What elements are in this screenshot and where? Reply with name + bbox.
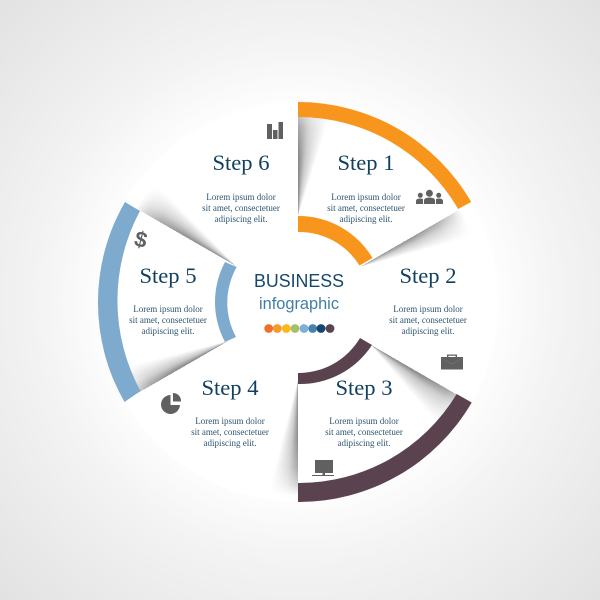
heading: step 1: Step 1 bbox=[337, 150, 395, 175]
text: step 2 body: Lorem ipsum dolor bbox=[393, 304, 463, 314]
shadow: left of step 3 bbox=[277, 381, 298, 494]
icon: people bbox=[416, 190, 443, 204]
panel: step 1 wedge bbox=[298, 102, 472, 266]
text: step 5 body: sit amet, consectetuer bbox=[129, 315, 207, 325]
outer band: step 5 bbox=[98, 202, 140, 402]
subtitle: infographic: infographic bbox=[259, 294, 339, 313]
outer band: step 3 bbox=[298, 394, 472, 502]
icon: bar chart bbox=[267, 122, 283, 139]
text: step 5 body: adipiscing elit. bbox=[142, 326, 194, 336]
text: step 3 body: adipiscing elit. bbox=[338, 438, 390, 448]
text: step 4 body: adipiscing elit. bbox=[204, 438, 256, 448]
text: step 6 body: Lorem ipsum dolor bbox=[206, 192, 276, 202]
text: step 3 body: sit amet, consectetuer bbox=[325, 427, 403, 437]
heading: step 3: Step 3 bbox=[335, 375, 393, 400]
shadow: step 1 left edge bbox=[298, 117, 323, 215]
text: step 2 body: sit amet, consectetuer bbox=[389, 315, 467, 325]
inner band: step 3 bbox=[298, 338, 372, 384]
text: step 6 body: sit amet, consectetuer bbox=[202, 203, 280, 213]
icon: dollar: $ bbox=[132, 226, 150, 253]
panel: central disc bbox=[98, 102, 498, 502]
text: step 2 body: adipiscing elit. bbox=[402, 326, 454, 336]
icon: monitor bbox=[312, 460, 334, 476]
panel: step 5 wedge bbox=[98, 202, 237, 402]
text: step 5 body: Lorem ipsum dolor bbox=[133, 304, 203, 314]
shadow: below step 1 bbox=[360, 210, 462, 267]
heading: step 2: Step 2 bbox=[399, 263, 457, 288]
shadow: step 3 top edge bbox=[372, 346, 456, 416]
outer band: step 1 bbox=[298, 102, 471, 209]
color dots bbox=[264, 324, 334, 333]
panel: step 3 wedge bbox=[298, 338, 472, 502]
text: step 1 body: adipiscing elit. bbox=[340, 214, 392, 224]
text: step 1 body: Lorem ipsum dolor bbox=[331, 192, 401, 202]
heading: step 5: Step 5 bbox=[139, 263, 197, 288]
icon: briefcase bbox=[441, 354, 463, 370]
shadow: step 5 lower edge bbox=[132, 341, 228, 394]
text: step 6 body: adipiscing elit. bbox=[214, 214, 268, 224]
heading: step 4: Step 4 bbox=[201, 375, 259, 400]
inner band: step 1 bbox=[298, 216, 372, 266]
text: step 4 body: Lorem ipsum dolor bbox=[195, 416, 265, 426]
title: business: BUSINESS bbox=[254, 270, 344, 291]
text: step 4 body: sit amet, consectetuer bbox=[191, 427, 269, 437]
text: step 3 body: Lorem ipsum dolor bbox=[329, 416, 399, 426]
text: step 1 body: sit amet, consectetuer bbox=[327, 203, 405, 213]
icon: pie chart bbox=[161, 393, 181, 414]
heading: step 6: Step 6 bbox=[212, 150, 270, 175]
shadow: above step 5 bbox=[138, 196, 235, 266]
inner band: step 5 bbox=[215, 262, 237, 342]
